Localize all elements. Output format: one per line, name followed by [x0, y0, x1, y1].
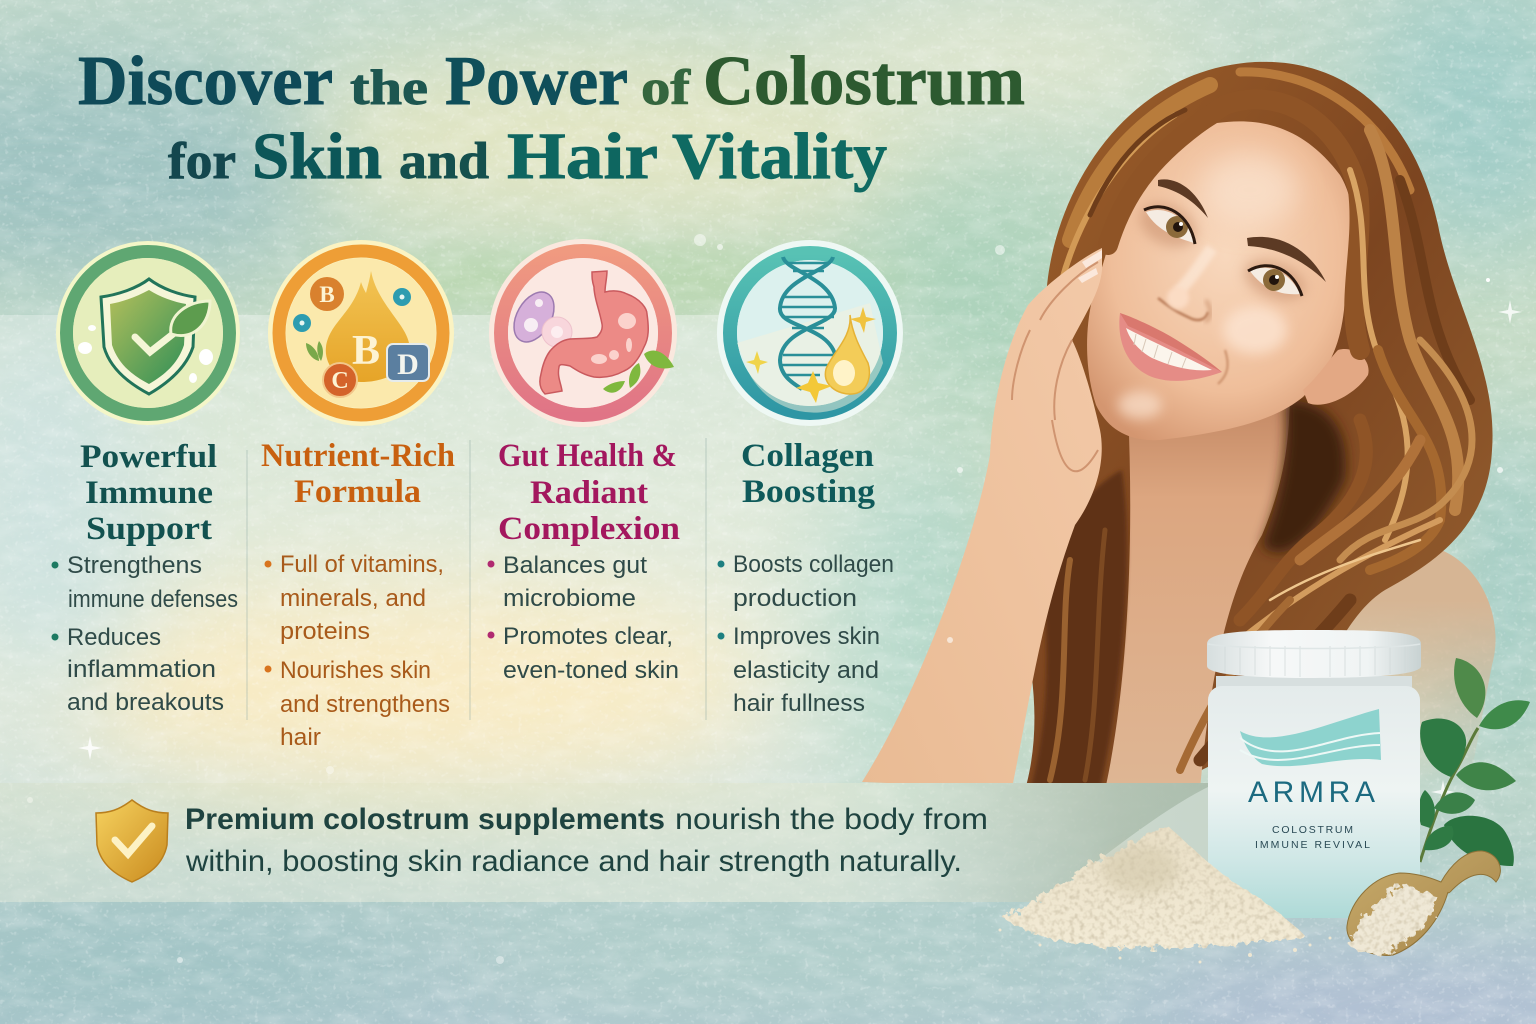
column: nutrient-rich formula [261, 438, 455, 751]
bullets: Nourishes skin [280, 657, 431, 684]
heading [498, 438, 680, 547]
bullets: and strengthens [280, 691, 450, 718]
label text: ARMRA [1248, 776, 1375, 809]
icon: nutrient drop: D [397, 348, 419, 381]
right eye [1240, 256, 1308, 304]
bullets [264, 551, 450, 751]
icon: nutrient drop [268, 240, 454, 426]
bullets [52, 552, 238, 716]
label text: IMMUNE REVIVAL [1255, 839, 1370, 851]
title [78, 43, 1025, 193]
heading: Collagen [741, 438, 874, 474]
heading [80, 439, 217, 547]
bullets [488, 552, 679, 684]
title: Discover [78, 43, 333, 120]
heading [741, 438, 876, 510]
bullets: minerals, and [280, 585, 426, 612]
bullets: microbiome [503, 585, 636, 612]
heading: Powerful [80, 439, 217, 475]
icon: nutrient drop: B [352, 328, 380, 374]
label text [1248, 776, 1375, 851]
heading: Gut Health & [498, 438, 677, 474]
heading: Immune [85, 475, 213, 511]
bullets: hair [280, 724, 321, 751]
title: of [641, 59, 692, 115]
callout text [185, 803, 988, 878]
icon: gold shield [96, 800, 168, 882]
callout text: nourish the body from [675, 803, 988, 836]
nose [1158, 248, 1212, 322]
bullets: Balances gut [503, 552, 647, 579]
bullets: inflammation [67, 656, 216, 683]
scoop with powder [1347, 851, 1500, 955]
right eyebrow [1247, 237, 1326, 282]
callout text: within, boosting skin radiance and hair strength naturally. [185, 845, 962, 878]
bullets: Promotes clear, [503, 623, 673, 650]
neck and chest [1105, 385, 1290, 790]
heading: Boosting [742, 474, 876, 510]
forehead highlight [1202, 154, 1298, 226]
heading: Formula [294, 474, 421, 510]
heading: Complexion [498, 511, 680, 547]
sparkles [27, 234, 1522, 964]
callout text: Premium colostrum supplements [185, 803, 665, 836]
hair front strands [1047, 67, 1476, 783]
bullets: Full of vitamins, [280, 551, 444, 578]
bullets: even-toned skin [503, 657, 679, 684]
icon: nutrient drop: B [319, 282, 335, 307]
bullets: immune defenses [68, 586, 238, 613]
bullets: Reduces [67, 624, 161, 651]
bullets: proteins [280, 618, 370, 645]
ear [1303, 349, 1369, 405]
arm and hand [862, 248, 1102, 788]
bullets: production [733, 585, 857, 612]
bullets: hair fullness [733, 690, 865, 717]
cheek highlight [1223, 306, 1287, 354]
icon: immune shield [56, 241, 240, 425]
smile [1119, 313, 1228, 384]
dark hair under jaw [1262, 400, 1346, 553]
title: the [350, 59, 428, 115]
face [1087, 121, 1353, 440]
faded body under callout band [900, 783, 1220, 905]
title: Hair [507, 120, 658, 193]
jar lid [1207, 630, 1421, 678]
powder pile [998, 827, 1332, 964]
bullets: and breakouts [67, 689, 224, 716]
right shoulder with strap [1347, 551, 1496, 758]
heading: Support [86, 511, 212, 547]
bullets: Strengthens [67, 552, 202, 579]
title: Skin [252, 120, 382, 193]
label text: COLOSTRUM [1272, 824, 1353, 836]
column dividers [247, 438, 706, 720]
bullets: Improves skin [733, 623, 880, 650]
title: Vitality [672, 120, 887, 193]
title: Power [445, 43, 628, 120]
left eyebrow [1158, 179, 1208, 218]
icon: nutrient drop: C [331, 368, 349, 394]
title: and [399, 133, 489, 190]
product jar [1207, 630, 1421, 918]
icon: gut health [489, 239, 677, 427]
column: collagen boosting [718, 438, 894, 717]
title: Colostrum [703, 43, 1025, 120]
hair back [1003, 62, 1493, 795]
bullets: Boosts collagen [733, 551, 894, 578]
chin highlight [1118, 391, 1162, 419]
bullets [718, 551, 894, 717]
heading: Radiant [530, 475, 648, 511]
callout band [0, 783, 1215, 902]
column: gut health and radiant complexion [488, 438, 680, 684]
heading [261, 438, 455, 510]
bullets: elasticity and [733, 657, 879, 684]
woman portrait [862, 62, 1496, 795]
icon: collagen DNA [717, 240, 903, 426]
label wave [1240, 709, 1381, 766]
title: for [168, 133, 236, 190]
plant leaves [1419, 658, 1530, 866]
heading: Nutrient-Rich [261, 438, 455, 474]
left eye [1137, 200, 1200, 251]
column: powerful immune support [52, 439, 238, 716]
